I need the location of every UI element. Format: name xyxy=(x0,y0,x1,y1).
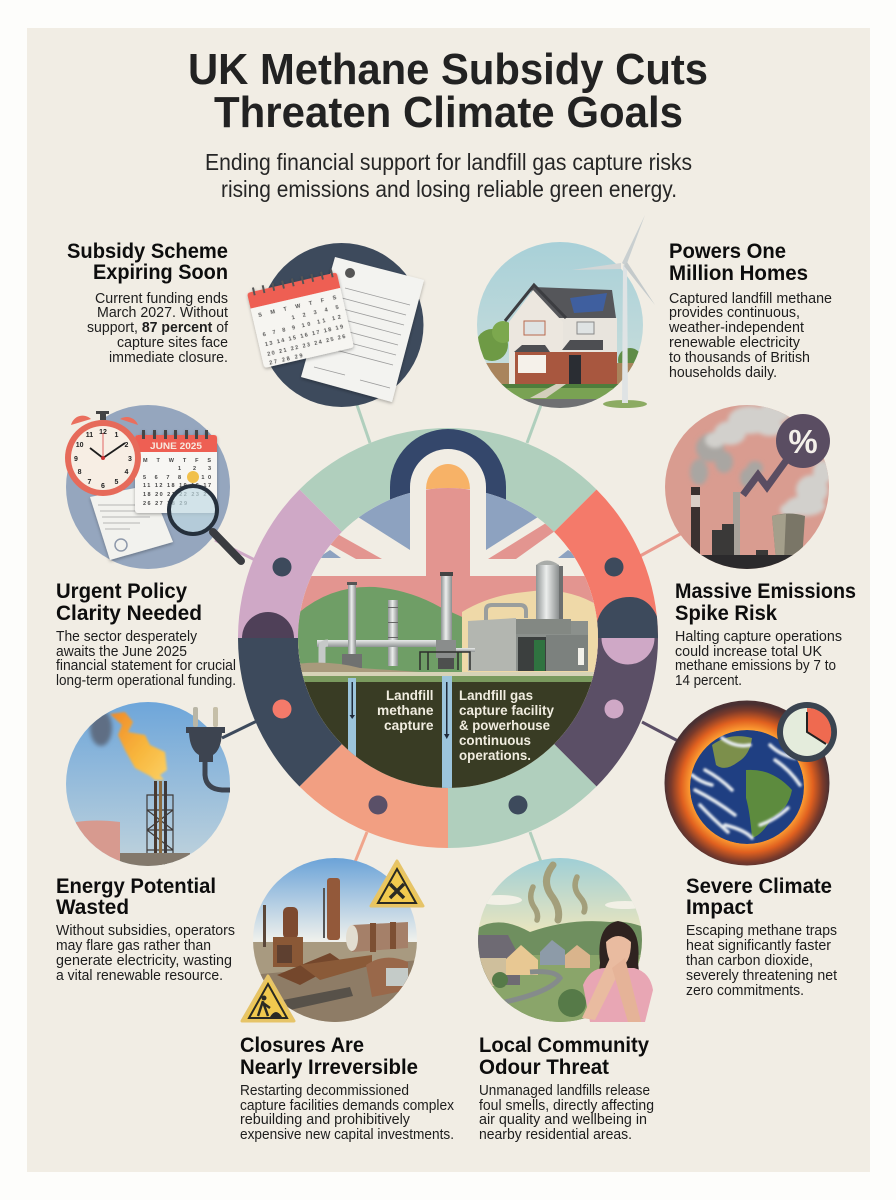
text: subsidy scheme: support, 87 percent of xyxy=(87,320,229,336)
letter document xyxy=(301,257,424,402)
text: powers homes: provides continuous, xyxy=(669,305,800,321)
heading: massive emissions: Massive Emissions xyxy=(675,579,856,603)
heading: powers homes: Powers One xyxy=(669,239,786,263)
heading: climate impact: Impact xyxy=(686,895,753,919)
icon: rusting plant and hazard signs circle xyxy=(242,858,423,1027)
capture label left: Landfill xyxy=(386,688,434,704)
text: odour: nearby residential areas. xyxy=(479,1127,632,1143)
alarm clock: 5 xyxy=(115,479,119,486)
alarm clock xyxy=(65,411,141,496)
june calendar: 11 12 18 19 16 17 xyxy=(143,483,211,489)
heading: urgent policy: Clarity Needed xyxy=(56,601,202,625)
earth globe xyxy=(690,730,804,844)
capture label right: capture facility xyxy=(459,703,554,719)
text: powers homes: to thousands of British xyxy=(669,350,810,366)
text: odour: air quality and wellbeing in xyxy=(479,1112,647,1128)
text: urgent policy: long-term operational funding. xyxy=(56,673,236,689)
alarm clock: 12 xyxy=(99,429,107,436)
capture label left xyxy=(377,688,434,734)
heading: powers homes xyxy=(669,239,808,285)
text: closures: capture facilities demands complex xyxy=(240,1098,455,1114)
house xyxy=(505,285,617,384)
text: subsidy scheme: March 2027. Without xyxy=(97,305,228,321)
landfill gas facility xyxy=(317,560,588,671)
capture label right: & powerhouse xyxy=(459,718,550,734)
june calendar: M T W T F S xyxy=(143,458,211,464)
text: climate impact: Escaping methane traps xyxy=(686,923,837,939)
icon: burning earth and clock circle xyxy=(664,700,837,866)
subtitle: Ending financial support for landfill gas capture risks xyxy=(205,149,692,175)
text: urgent policy: The sector desperately xyxy=(56,629,198,645)
heading: subsidy scheme: Subsidy Scheme xyxy=(67,239,228,263)
wall calendar xyxy=(246,268,354,368)
policy document xyxy=(90,485,173,560)
wall calendar: 20 21 22 23 24 25 26 xyxy=(267,334,346,358)
ring dots xyxy=(272,558,624,814)
heading: energy wasted: Energy Potential xyxy=(56,874,216,898)
text: odour: Unmanaged landfills release xyxy=(479,1083,650,1099)
heading: energy wasted: Wasted xyxy=(56,895,129,919)
alarm clock: 4 xyxy=(124,469,128,476)
alarm clock: 8 xyxy=(78,469,82,476)
heading: massive emissions xyxy=(675,579,856,625)
wall calendar: 6 7 8 9 10 11 12 xyxy=(262,315,342,338)
icon: smokestacks and percent circle xyxy=(665,401,833,573)
june calendar: JUNE 2025 xyxy=(150,441,203,452)
heading: odour xyxy=(479,1033,649,1079)
heading: closures: Closures Are xyxy=(240,1033,364,1057)
capture label right: Landfill gas xyxy=(459,688,533,704)
june calendar: 18 20 21 22 23 24 xyxy=(143,492,212,498)
heading: odour: Local Community xyxy=(479,1033,649,1057)
text: subsidy scheme xyxy=(87,291,229,366)
text: energy wasted: a vital renewable resource. xyxy=(56,968,223,984)
text: subsidy scheme: immediate closure. xyxy=(109,350,228,366)
heading: powers homes: Million Homes xyxy=(669,261,808,285)
text: closures: rebuilding and prohibitively xyxy=(240,1112,411,1128)
text: energy wasted: Without subsidies, operators xyxy=(56,923,235,939)
icon: house and wind turbine circle xyxy=(476,215,655,409)
heading: climate impact: Severe Climate xyxy=(686,874,832,898)
hazard sign: workman xyxy=(242,976,294,1021)
alarm clock: 7 xyxy=(88,479,92,486)
heading: energy wasted xyxy=(56,874,216,919)
icon: gas flare and plug circle xyxy=(66,702,230,867)
text: energy wasted: generate electricity, wasting xyxy=(56,953,232,969)
text: subsidy scheme: capture sites face xyxy=(117,335,228,351)
capture label left: methane xyxy=(377,703,434,719)
magnifier xyxy=(169,486,241,561)
text: powers homes: Captured landfill methane xyxy=(669,291,832,307)
title xyxy=(188,45,708,137)
heading: closures xyxy=(240,1033,418,1079)
text: energy wasted xyxy=(56,923,235,984)
text: urgent policy: financial statement for crucial xyxy=(56,658,236,674)
alarm clock: 1 xyxy=(115,432,119,439)
text: massive emissions: could increase total UK xyxy=(675,644,822,660)
alarm clock: 9 xyxy=(74,456,78,463)
title: Threaten Climate Goals xyxy=(214,88,683,137)
june calendar: 5 6 7 8 9 10 xyxy=(143,475,211,481)
arch emblem xyxy=(390,429,506,520)
text: massive emissions xyxy=(675,629,842,689)
text: massive emissions: 14 percent. xyxy=(675,673,742,689)
capture label right: operations. xyxy=(459,748,531,764)
icon: residential odour circle xyxy=(478,858,653,1025)
text: climate impact: zero commitments. xyxy=(686,983,804,999)
text: closures xyxy=(240,1083,455,1143)
text: powers homes: households daily. xyxy=(669,365,777,381)
text: urgent policy: awaits the June 2025 xyxy=(56,644,187,660)
wall calendar: 13 14 15 16 17 18 19 xyxy=(265,324,344,348)
alarm clock: 3 xyxy=(128,456,132,463)
june calendar: 1 2 3 xyxy=(178,466,211,472)
alarm clock: 10 xyxy=(76,442,84,449)
alarm clock: 11 xyxy=(86,432,93,439)
connector lines xyxy=(215,405,682,862)
odour wisps xyxy=(531,865,585,920)
heading: subsidy scheme xyxy=(67,239,228,284)
title: UK Methane Subsidy Cuts xyxy=(188,45,708,94)
text: subsidy scheme: Current funding ends xyxy=(95,291,228,307)
text: climate impact: than carbon dioxide, xyxy=(686,953,813,969)
capture label right xyxy=(459,688,554,764)
subtitle: rising emissions and losing reliable green energy. xyxy=(221,176,677,202)
subtitle xyxy=(205,149,692,202)
icon: calendar and letter circle xyxy=(246,243,424,407)
hazard sign: cross xyxy=(371,861,423,906)
arrow and percent badge xyxy=(743,414,830,495)
june calendar xyxy=(135,430,217,513)
text: climate impact: severely threatening net xyxy=(686,968,837,984)
wind turbine xyxy=(572,215,655,408)
wall calendar: S M T W T F S xyxy=(258,295,337,319)
woman covering nose xyxy=(582,921,653,1022)
text: massive emissions: Halting capture operations xyxy=(675,629,842,645)
text: climate impact xyxy=(686,923,837,999)
alarm clock: 2 xyxy=(124,442,128,449)
heading: urgent policy xyxy=(56,579,202,625)
text: odour xyxy=(479,1083,654,1143)
text: powers homes: weather-independent xyxy=(668,320,804,336)
heading: urgent policy: Urgent Policy xyxy=(56,579,187,603)
capture label left: capture xyxy=(384,718,434,734)
heading: closures: Nearly Irreversible xyxy=(240,1055,418,1079)
text: closures: expensive new capital investments. xyxy=(240,1127,454,1143)
alarm clock: 6 xyxy=(101,483,105,490)
text: powers homes: renewable electricity xyxy=(669,335,801,351)
plug xyxy=(186,707,230,790)
capture label right: continuous xyxy=(459,733,531,749)
text: odour: foul smells, directly affecting xyxy=(479,1098,654,1114)
heading: massive emissions: Spike Risk xyxy=(675,601,777,625)
text: urgent policy xyxy=(56,629,236,689)
union flag and landfill scene xyxy=(290,488,606,792)
text: closures: Restarting decommissioned xyxy=(240,1083,409,1099)
countdown clock xyxy=(777,702,837,762)
central ring diagram xyxy=(238,428,662,848)
heading: subsidy scheme: Expiring Soon xyxy=(93,260,228,284)
text: climate impact: heat significantly faster xyxy=(686,938,831,954)
text: massive emissions: methane emissions by 7 to xyxy=(675,658,836,674)
heading: climate impact xyxy=(686,874,832,919)
text: powers homes xyxy=(668,291,832,381)
arrow and percent badge: % xyxy=(788,423,818,460)
icon: clock, calendar and magnifier circle xyxy=(65,405,241,569)
ring segments xyxy=(238,428,662,848)
june calendar: 26 27 28 29 xyxy=(143,501,187,507)
wall calendar: 27 28 29 xyxy=(269,353,303,367)
heading: odour: Odour Threat xyxy=(479,1055,609,1079)
wall calendar: 1 2 3 4 5 xyxy=(291,305,339,321)
text: energy wasted: may flare gas rather than xyxy=(56,938,211,954)
